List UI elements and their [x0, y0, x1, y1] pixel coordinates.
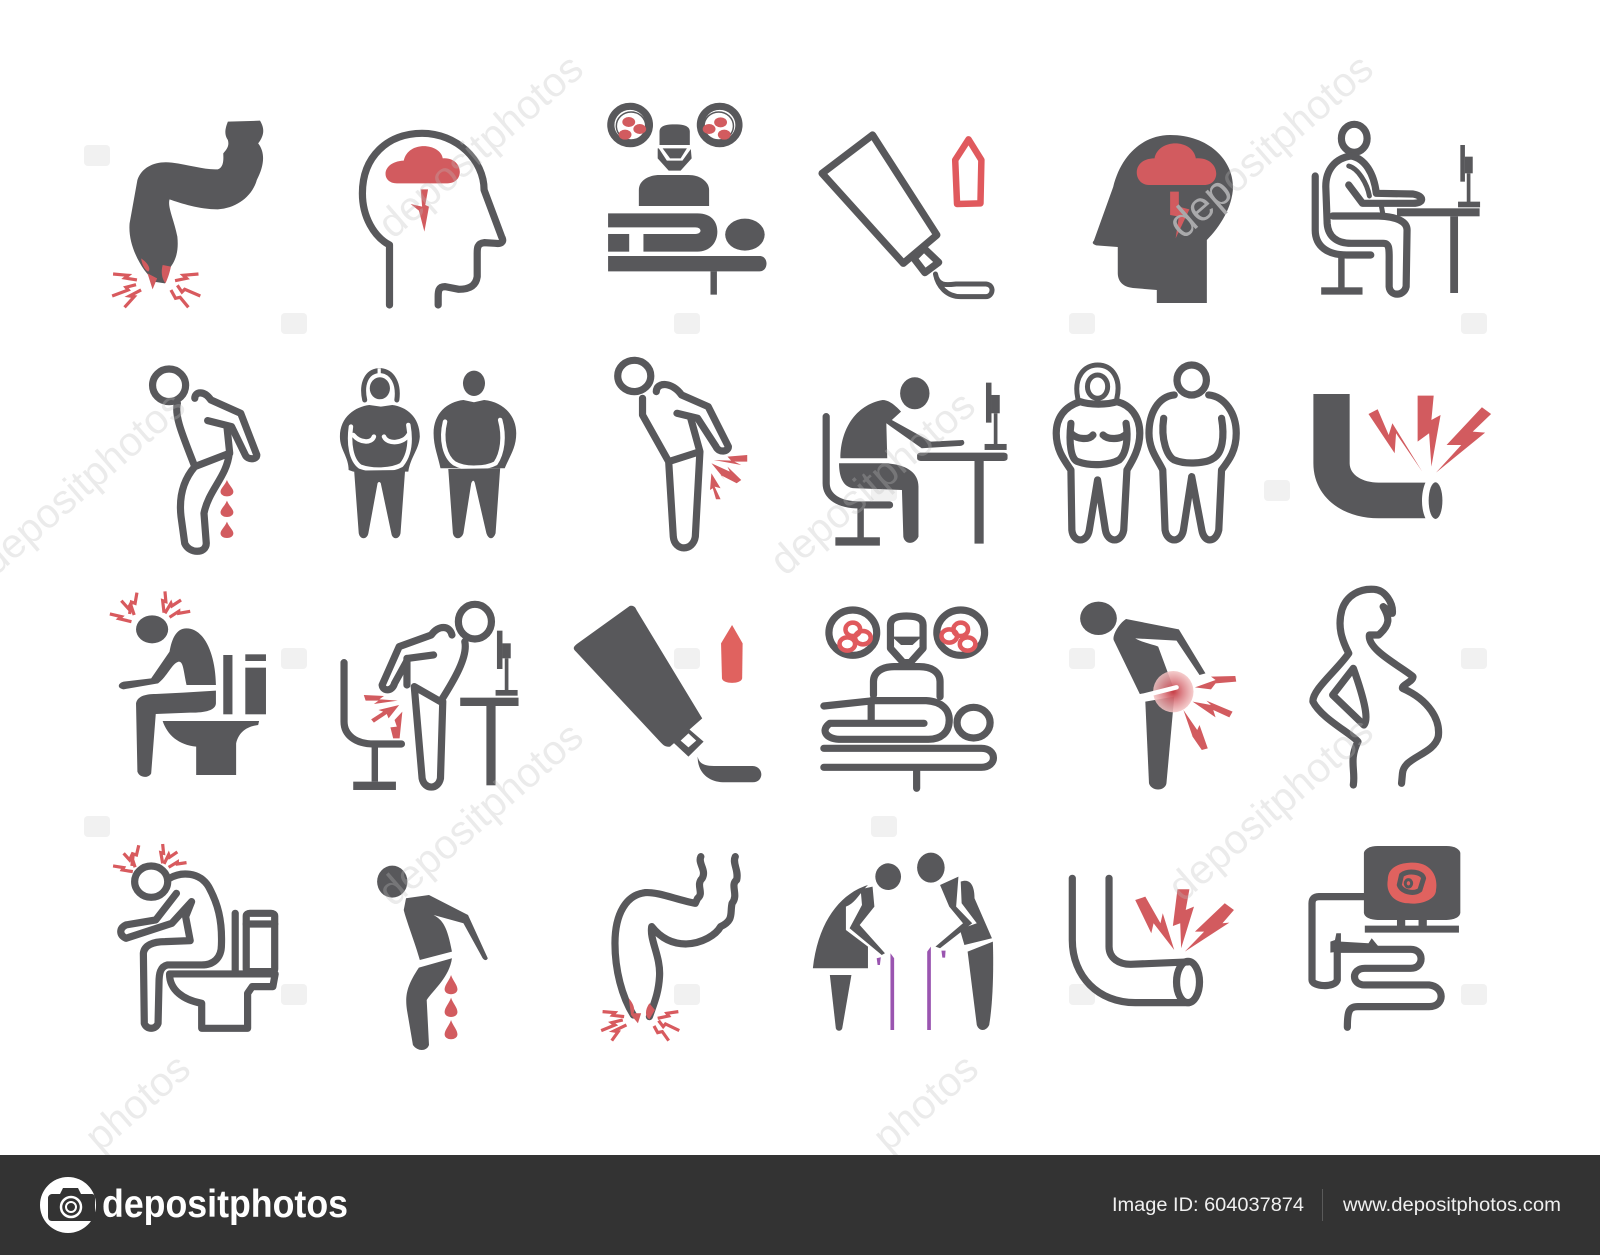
footer banner: [0, 1155, 1600, 1255]
image id: Image ID: 604037874: [1112, 1195, 1304, 1216]
icon: filled pipe with lightning: [1313, 394, 1491, 519]
icon: filled surgery scene: [608, 106, 767, 295]
icon: outlined ointment tube and suppository: [822, 135, 992, 297]
watermark text over icons: photos: [76, 1044, 199, 1160]
icon: outlined pipe with lightning: [1072, 878, 1234, 1003]
icon: outlined pregnant woman: [1313, 589, 1439, 785]
watermark text over icons: photos: [864, 1044, 987, 1160]
website url: www.depositphotos.com: [1342, 1195, 1561, 1216]
icon: filled hunched person at desk: [826, 377, 1008, 546]
icon: outlined head with storm cloud: [362, 133, 503, 305]
icon: outlined surgery scene: [824, 610, 993, 788]
icon: outlined person bending at desk with pain: [344, 604, 519, 790]
icon: outlined colon with pain: [601, 857, 737, 1041]
icon: filled person with bleeding: [377, 866, 488, 1050]
logo camera icon: [40, 1177, 96, 1233]
icon: filled head with storm cloud: [1093, 135, 1233, 303]
watermark text over icons: [0, 45, 1382, 1160]
watermark text over icons: depositphotos: [1159, 45, 1382, 247]
watermark text over icons: dep: [1159, 167, 1241, 247]
icon: filled colon with pain: [112, 121, 263, 307]
watermark text over icons: depositphotos: [369, 45, 592, 247]
watermark text over icons: depositphotos: [761, 382, 984, 584]
icon: filled bending person with hip pain: [1080, 602, 1236, 790]
watermark camera marks: [84, 145, 1487, 1005]
icon: filled ointment tube and suppository: [574, 606, 761, 782]
icon: outlined overweight couple: [1056, 365, 1236, 540]
watermark text over icons: depositphotos: [1159, 708, 1382, 910]
icon: outlined bending person with pain: [618, 360, 747, 548]
watermark text over icons: depositphotos: [369, 713, 592, 915]
icon: elderly couple with walking sticks: [813, 853, 993, 1031]
icon: filled person on toilet: [110, 591, 266, 777]
icon: endoscopy with monitor: [1312, 846, 1460, 1027]
icon: outlined person on toilet: [113, 844, 275, 1028]
icon: outlined person sitting at desk: [1315, 124, 1480, 295]
icon: outlined person with bleeding: [153, 369, 257, 551]
pain spot: [1153, 671, 1194, 712]
logo wordmark: depositphotos: [102, 1183, 348, 1226]
icon: filled overweight couple: [340, 368, 516, 538]
